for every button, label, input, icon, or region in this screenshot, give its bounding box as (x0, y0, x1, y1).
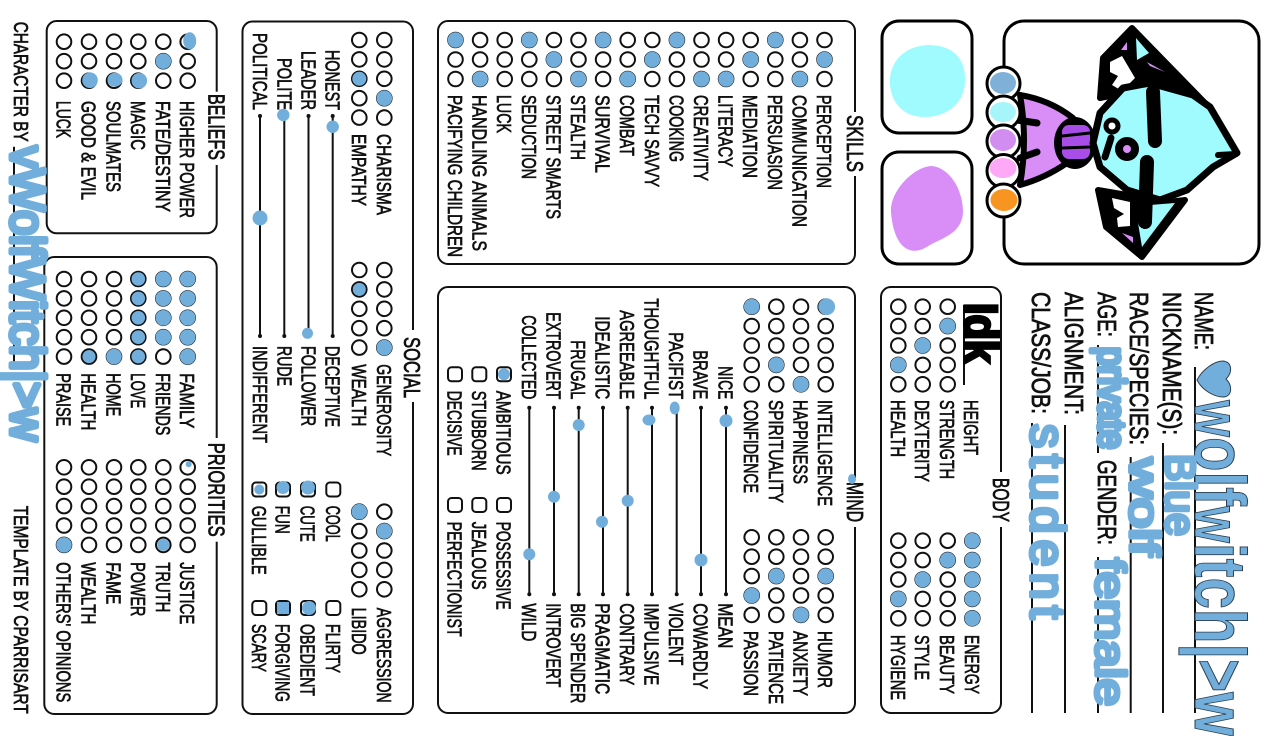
slider: thoughtful to impulsive (640, 298, 662, 685)
icon: palette circle purple (987, 125, 1020, 158)
age and gender lines (1097, 345, 1099, 713)
slider: thoughtful to impulsive: THOUGHTFUL (640, 298, 662, 399)
rating: truth (151, 460, 173, 612)
rating: street smarts (541, 33, 563, 219)
rating: energy: ENERGY (960, 635, 982, 694)
race line (1130, 457, 1132, 713)
icon: eye bars (1145, 92, 1155, 222)
checkbox: fun (270, 481, 292, 534)
rating: seduction (517, 32, 539, 179)
rating: empathy (347, 33, 369, 206)
panel: social (242, 22, 425, 714)
slider: nice to mean (714, 366, 736, 648)
slider: brave to cowardly: COWARDLY (688, 603, 710, 689)
slider: polite to rude: RUDE (272, 346, 294, 386)
rating: praise: PRAISE (52, 373, 74, 426)
checkbox: cool (321, 482, 343, 542)
rating: creativity (689, 33, 711, 181)
rating: health priority (76, 272, 98, 430)
rating: hygiene (886, 533, 908, 700)
rating: combat: COMBAT (615, 95, 637, 156)
slider: idealistic to pragmatic: IDEALISTIC (590, 316, 612, 399)
checkbox: flirty: FLIRTY (321, 624, 343, 673)
rating: wealth (347, 263, 369, 426)
rating: justice: JUSTICE (175, 562, 197, 624)
rating: patience (764, 530, 786, 704)
checkbox: decisive (442, 367, 464, 456)
height handwriting and label (955, 303, 1007, 455)
checkbox: jealous (467, 498, 489, 590)
checkbox: gullible: GULLIBLE (247, 506, 269, 575)
rating: mediation (738, 33, 760, 178)
height handwriting and label: Idk (955, 303, 1007, 363)
handwritten age: private (1090, 347, 1132, 449)
checkbox: possessive: POSSESSIVE (492, 522, 514, 610)
slider: brave to cowardly: BRAVE (688, 350, 710, 399)
slider: frugal to big spender (566, 340, 588, 703)
rating: handling animals (468, 33, 490, 251)
handwritten nickname: Blue (1157, 454, 1204, 536)
slider: thoughtful to impulsive: IMPULSIVE (640, 603, 662, 685)
checkbox: ambitious (492, 367, 514, 475)
heading: skills: SKILLS (842, 115, 868, 172)
heading: beliefs: BELIEFS (203, 94, 229, 160)
rating: magic: MAGIC (126, 101, 148, 150)
checkbox: decisive: DECISIVE (442, 391, 464, 456)
name line (1194, 367, 1196, 713)
panel: skills (438, 21, 868, 264)
heading: mind: MIND (842, 482, 868, 522)
rating: beauty: BEAUTY (935, 635, 957, 694)
rating: creativity: CREATIVITY (689, 95, 711, 181)
slider: honest to deceptive: HONEST (321, 50, 343, 110)
checkbox: forgiving (270, 601, 292, 702)
rating: anxiety: ANXIETY (788, 631, 810, 696)
checkbox: forgiving: FORGIVING (270, 624, 292, 702)
slider: pacifist to violent: PACIFIST (664, 332, 686, 399)
rating: empathy: EMPATHY (347, 134, 369, 206)
rating: wealth priority (76, 460, 98, 624)
rating: passion: PASSION (739, 631, 761, 696)
slider: political to indifferent (248, 33, 270, 443)
rating: magic (126, 34, 148, 150)
panel: priorities (44, 257, 229, 714)
rating: literacy: LITERACY (714, 95, 736, 167)
rating: soulmates: SOULMATES (102, 101, 124, 192)
slider: agreeable to contrary (615, 310, 637, 685)
field: age label: AGE: (1092, 292, 1122, 337)
rating: persuasion (763, 32, 785, 190)
rating: handling animals: HANDLING ANIMALS (468, 95, 490, 251)
rating: luck: LUCK (492, 95, 514, 133)
rating: literacy (714, 33, 736, 167)
panel: purple swatch (882, 152, 972, 264)
panel: beliefs (47, 21, 229, 233)
checkbox: fun: FUN (270, 506, 292, 534)
checkbox: ambitious: AMBITIOUS (492, 391, 514, 475)
handwritten gender: female (1087, 558, 1134, 706)
field: gender label: GENDER: (1092, 460, 1122, 545)
rating: stealth (566, 33, 588, 160)
rating: humor (813, 530, 835, 688)
checkbox: stubborn (467, 367, 489, 471)
icon: bottom ear (1098, 190, 1185, 257)
rating: power (126, 460, 148, 616)
slider: polite to rude (272, 58, 294, 386)
slider: nice to mean: MEAN (714, 603, 736, 648)
panel: character portrait (987, 21, 1259, 264)
checkbox: cute: CUTE (296, 506, 318, 542)
rating: good and evil (76, 34, 98, 200)
rating: health: HEALTH (886, 400, 908, 457)
credit line (13, 147, 15, 368)
rating: pacifying children (443, 32, 465, 257)
checkbox: scary (247, 601, 269, 672)
header fields (1020, 292, 1259, 736)
rating: perception (812, 33, 834, 188)
rating: intelligence: INTELLIGENCE (813, 400, 835, 506)
rating: anxiety (788, 530, 810, 696)
rating: others' opinions (52, 460, 74, 702)
checkbox: obedient: OBEDIENT (296, 624, 318, 696)
rating: health priority: HEALTH (76, 373, 98, 430)
icon: palette circle cyan (987, 96, 1020, 129)
rating: generosity (372, 263, 394, 456)
icon: palette circle orange (987, 184, 1020, 217)
panel: cyan swatch (882, 21, 972, 133)
rating: stealth: STEALTH (566, 95, 588, 160)
slider: extrovert to introvert (542, 312, 564, 687)
panel: body (881, 287, 1014, 713)
rating: tech savvy (640, 33, 662, 187)
rating: friends (151, 271, 173, 435)
slider: frugal to big spender: FRUGAL (566, 340, 588, 399)
field: race label: RACE/SPECIES: (1124, 292, 1154, 445)
rating: friends: FRIENDS (151, 373, 173, 435)
checkbox: stubborn: STUBBORN (467, 391, 489, 471)
rating: justice (175, 460, 197, 624)
rating: patience: PATIENCE (764, 631, 786, 704)
rating: pacifying children: PACIFYING CHILDREN (443, 95, 465, 257)
icon: top ear (1100, 28, 1208, 106)
slider: extrovert to introvert: INTROVERT (542, 603, 564, 687)
icon: paws (1017, 120, 1037, 158)
handwritten artist name: vWolfWitch|>w (0, 146, 53, 441)
rating: spirituality: SPIRITUALITY (764, 400, 786, 503)
field: nickname label: NICKNAME(S): (1157, 292, 1187, 435)
slider: leader to follower: FOLLOWER (296, 346, 318, 426)
rating: passion (739, 530, 761, 696)
nickname line (1162, 443, 1164, 713)
rating: good and evil: GOOD & EVIL (76, 101, 98, 200)
rating: luck belief: LUCK (52, 101, 74, 138)
checkbox: jealous: JEALOUS (467, 522, 489, 590)
icon: heart (1197, 361, 1231, 397)
rating: higher power: HIGHER POWER (175, 101, 197, 218)
heading: priorities: PRIORITIES (203, 443, 229, 537)
rating: tech savvy: TECH SAVVY (640, 95, 662, 187)
heading: body (988, 472, 1014, 527)
rating: dexterity: DEXTERITY (910, 400, 932, 482)
checkbox: cute (296, 480, 318, 542)
checkbox: perfectionist: PERFECTIONIST (442, 522, 464, 637)
slider: agreeable to contrary: CONTRARY (615, 603, 637, 685)
checkbox: perfectionist (442, 498, 464, 637)
rating: happiness (788, 299, 810, 484)
rating: communication: COMMUNICATION (787, 95, 809, 227)
slider: extrovert to introvert: EXTROVERT (542, 312, 564, 399)
slider: honest to deceptive: DECEPTIVE (321, 346, 343, 427)
checkbox: obedient (296, 601, 318, 696)
slider: nice to mean: NICE (714, 366, 736, 399)
rating: wealth: WEALTH (347, 364, 369, 426)
slider: political to indifferent: INDIFFERENT (248, 346, 270, 443)
rating: style: STYLE (910, 635, 932, 680)
rating: seduction: SEDUCTION (517, 95, 539, 179)
rating: love (126, 272, 148, 408)
rating: power: POWER (126, 562, 148, 616)
slider: leader to follower: LEADER (296, 51, 318, 110)
footer credits (0, 22, 53, 714)
checkbox: possessive (492, 498, 514, 610)
class line (1031, 423, 1033, 713)
rating: confidence (739, 299, 761, 493)
icon: snout (1105, 120, 1236, 157)
rating: aggression (372, 504, 394, 703)
field: name label: NAME: (1189, 292, 1219, 350)
rating: health (886, 299, 908, 457)
heading: mind (842, 474, 868, 527)
rating: style (910, 533, 932, 680)
slider: political to indifferent: POLITICAL (248, 33, 270, 110)
rating: wealth priority: WEALTH (76, 562, 98, 624)
slider: pacifist to violent (664, 332, 686, 665)
rating: combat (615, 33, 637, 156)
checkbox: gullible (247, 482, 269, 575)
heading: body: BODY (988, 478, 1014, 522)
rating: family: FAMILY (175, 373, 197, 428)
rating: fame (102, 460, 124, 604)
rating: libido: LIBIDO (347, 608, 369, 655)
slider: polite to rude: POLITE (272, 58, 294, 110)
slider: idealistic to pragmatic (590, 316, 612, 694)
slider: pacifist to violent: VIOLENT (664, 603, 686, 665)
panel: mind (438, 287, 868, 713)
handwritten class: student (1020, 424, 1073, 619)
rating: perception: PERCEPTION (812, 95, 834, 188)
rating: higher power (175, 32, 197, 218)
rating: persuasion: PERSUASION (763, 95, 785, 190)
rating: happiness: HAPPINESS (788, 400, 810, 484)
rating: luck belief (52, 34, 74, 138)
rating: mediation: MEDIATION (738, 95, 760, 178)
rating: truth: TRUTH (151, 562, 173, 612)
rating: charisma: CHARISMA (372, 134, 394, 215)
rating: hygiene: HYGIENE (886, 635, 908, 700)
icon: body (1020, 95, 1073, 185)
rating: communication (787, 33, 809, 227)
slider: collected to wild (517, 315, 539, 641)
field: alignment label: ALIGNMENT: (1059, 292, 1089, 415)
slider: honest to deceptive (321, 50, 343, 427)
slider: brave to cowardly (688, 350, 710, 689)
handwritten race: wolf (1121, 457, 1168, 556)
icon: head (1093, 83, 1237, 200)
rating: strength: STRENGTH (935, 400, 957, 479)
rating: family (175, 271, 197, 428)
rating: libido (347, 504, 369, 655)
rating: luck (492, 33, 514, 133)
rating: dexterity (910, 299, 932, 482)
icon: palette circle pink (987, 154, 1020, 188)
checkbox: flirty (321, 601, 343, 673)
heading: social: SOCIAL (399, 337, 425, 398)
rating: charisma (372, 33, 394, 215)
slider: frugal to big spender: BIG SPENDER (566, 603, 588, 703)
slider: agreeable to contrary: AGREEABLE (615, 310, 637, 399)
rating: home (102, 272, 124, 416)
rating: cooking: COOKING (664, 95, 686, 162)
alignment line (1064, 425, 1066, 713)
rating: confidence: CONFIDENCE (739, 400, 761, 493)
rating: energy (960, 533, 982, 694)
rating: beauty (935, 533, 957, 694)
icon: palette circle blue (987, 67, 1020, 100)
rating: praise (52, 272, 74, 426)
checkbox: scary: SCARY (247, 624, 269, 672)
rating: love: LOVE (126, 373, 148, 408)
field: class label: CLASS/JOB: (1026, 292, 1056, 414)
rating: survival: SURVIVAL (591, 95, 613, 173)
rating: home: HOME (102, 373, 124, 416)
rating: generosity: GENEROSITY (372, 364, 394, 456)
rating: fame: FAME (102, 562, 124, 604)
rating: survival (591, 32, 613, 173)
rating: fate/destiny (151, 34, 173, 212)
checkbox: cool: COOL (321, 506, 343, 542)
rating: fate/destiny: FATE/DESTINY (151, 101, 173, 212)
icon: collar (1054, 117, 1096, 169)
rating: soulmates (102, 34, 124, 192)
slider: leader to follower (296, 51, 318, 426)
rating: intelligence (813, 298, 835, 506)
rating: humor: HUMOR (813, 631, 835, 688)
rating: cooking (664, 32, 686, 162)
height handwriting and label: HEIGHT (959, 400, 981, 455)
slider: collected to wild: WILD (517, 603, 539, 641)
slider: collected to wild: COLLECTED (517, 315, 539, 399)
rating: strength (935, 299, 957, 479)
slider: idealistic to pragmatic: PRAGMATIC (590, 603, 612, 694)
rating: spirituality (764, 299, 786, 503)
credit: character by: CHARACTER BY (9, 22, 31, 142)
rating: street smarts: STREET SMARTS (541, 95, 563, 219)
